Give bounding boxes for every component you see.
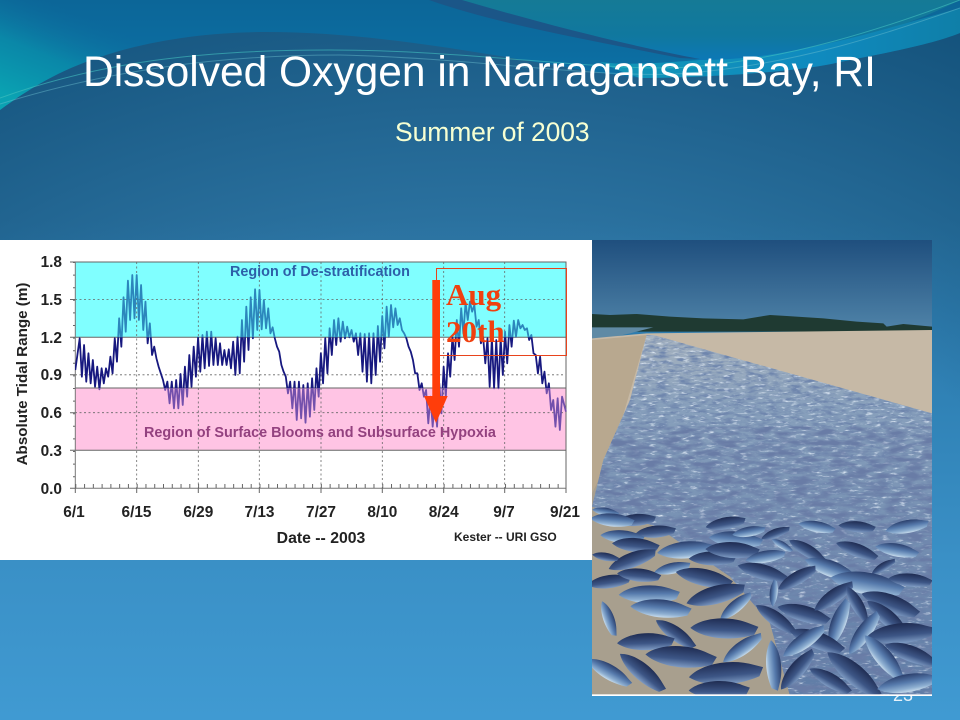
chart background: [0, 240, 592, 560]
y axis title: Absolute Tidal Range (m): [14, 283, 31, 465]
sky: [592, 240, 932, 330]
source credit: Kester -- URI GSO: [454, 530, 557, 544]
x axis labels: 7/13: [245, 504, 274, 521]
region label: surface blooms: Region of Surface Blooms and Subsurface Hypoxia: [144, 425, 497, 441]
band: region of surface blooms: [75, 388, 566, 450]
callout: Aug 20th: Aug: [446, 277, 502, 312]
band: region of de-stratification: [75, 262, 566, 337]
y axis labels: 1.5: [41, 292, 62, 309]
panel: tidal range chart: [0, 240, 592, 560]
x axis labels: [63, 504, 580, 521]
x axis labels: 6/29: [183, 504, 213, 521]
arrow: Aug 20th low tide: [424, 280, 448, 423]
photo: dead fish on beach: [592, 240, 932, 696]
callout: Aug 20th: 20th: [446, 314, 505, 349]
y axis labels: [41, 254, 62, 498]
y axis labels: 1.2: [41, 330, 62, 347]
grid lines: [75, 262, 566, 488]
x axis labels: 6/1: [63, 504, 85, 521]
treeline: [592, 314, 932, 332]
y axis labels: 0.9: [41, 367, 62, 384]
sand: [592, 330, 932, 696]
x axis labels: 9/21: [550, 504, 580, 521]
x axis labels: 8/10: [367, 504, 397, 521]
callout: Aug 20th: [436, 268, 566, 356]
x axis labels: 6/15: [122, 504, 152, 521]
x axis labels: 9/7: [493, 504, 515, 521]
y axis labels: 0.0: [41, 481, 62, 498]
region label: de-stratification: Region of De-stratification: [230, 264, 410, 280]
y axis labels: 1.8: [41, 254, 62, 271]
y axis labels: 0.3: [41, 443, 62, 460]
background waves: [0, 0, 960, 110]
water: [592, 327, 653, 342]
tidal range curve: [75, 275, 566, 430]
page number: 23: [893, 685, 913, 705]
x axis labels: 7/27: [306, 504, 336, 521]
fish mass: [592, 333, 932, 697]
y axis labels: 0.6: [41, 405, 62, 422]
photo bottom edge: [592, 694, 932, 696]
x axis title: Date -- 2003: [277, 530, 366, 547]
title: Dissolved Oxygen in Narragansett Bay, RI: [83, 49, 876, 96]
subtitle: Summer of 2003: [395, 117, 590, 147]
x axis labels: 8/24: [429, 504, 459, 521]
foreground fish: [583, 505, 939, 703]
band borders and axes: [70, 262, 566, 493]
